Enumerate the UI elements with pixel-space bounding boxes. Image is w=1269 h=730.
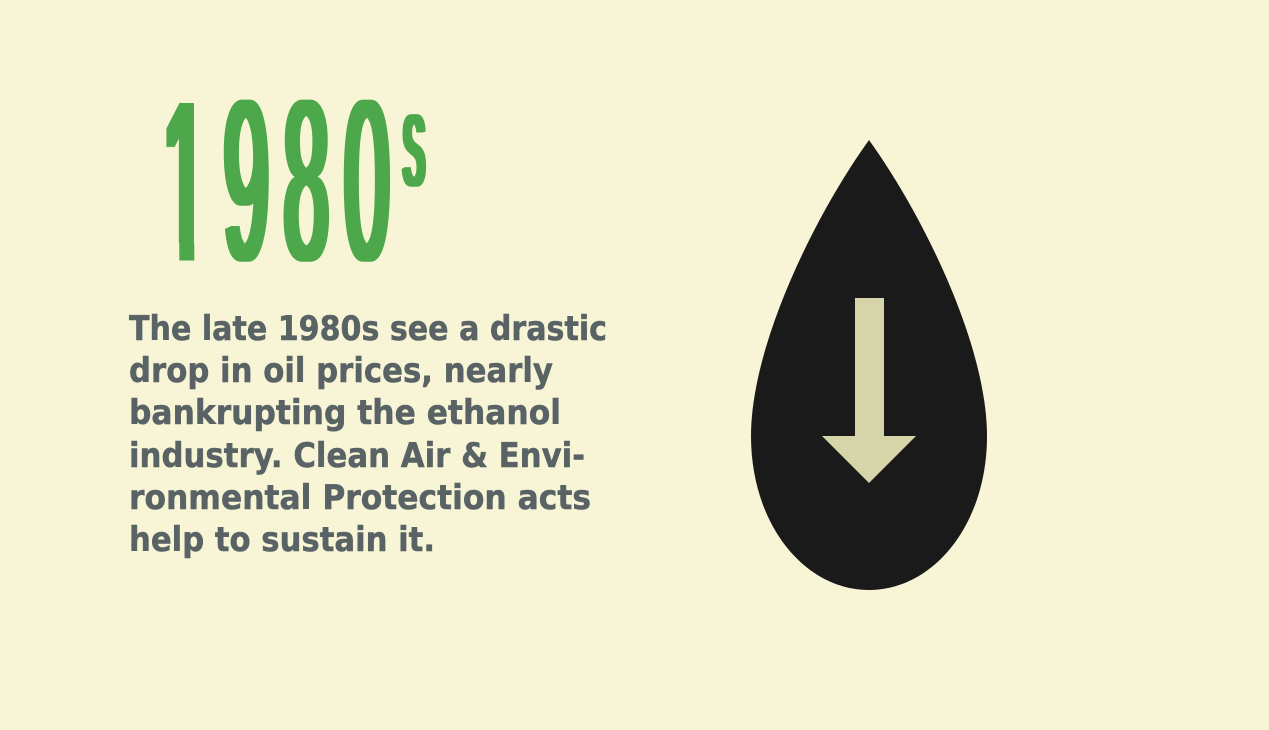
title: 1980s bbox=[166, 100, 426, 262]
text block: description: help to sustain it. bbox=[129, 520, 435, 560]
title: 1980s: s bbox=[403, 66, 425, 214]
text block: description: industry. Clean Air & Envi- bbox=[129, 436, 585, 476]
text block: description: ronmental Protection acts bbox=[129, 478, 591, 518]
text block: description: drop in oil prices, nearly bbox=[129, 351, 553, 391]
title: 1980s: 1 bbox=[163, 55, 207, 310]
text block: description: bankrupting the ethanol bbox=[129, 393, 561, 433]
title: 1980s: 9 bbox=[224, 54, 269, 309]
title: 1980s: 8 bbox=[284, 54, 329, 309]
title: 1980s: 0 bbox=[345, 54, 389, 309]
down arrow bbox=[822, 298, 916, 483]
text block: description bbox=[129, 309, 607, 560]
oil drop bbox=[751, 140, 987, 590]
text block: description: The late 1980s see a drastic bbox=[129, 309, 607, 349]
icon: oil drop with down arrow bbox=[751, 140, 987, 590]
